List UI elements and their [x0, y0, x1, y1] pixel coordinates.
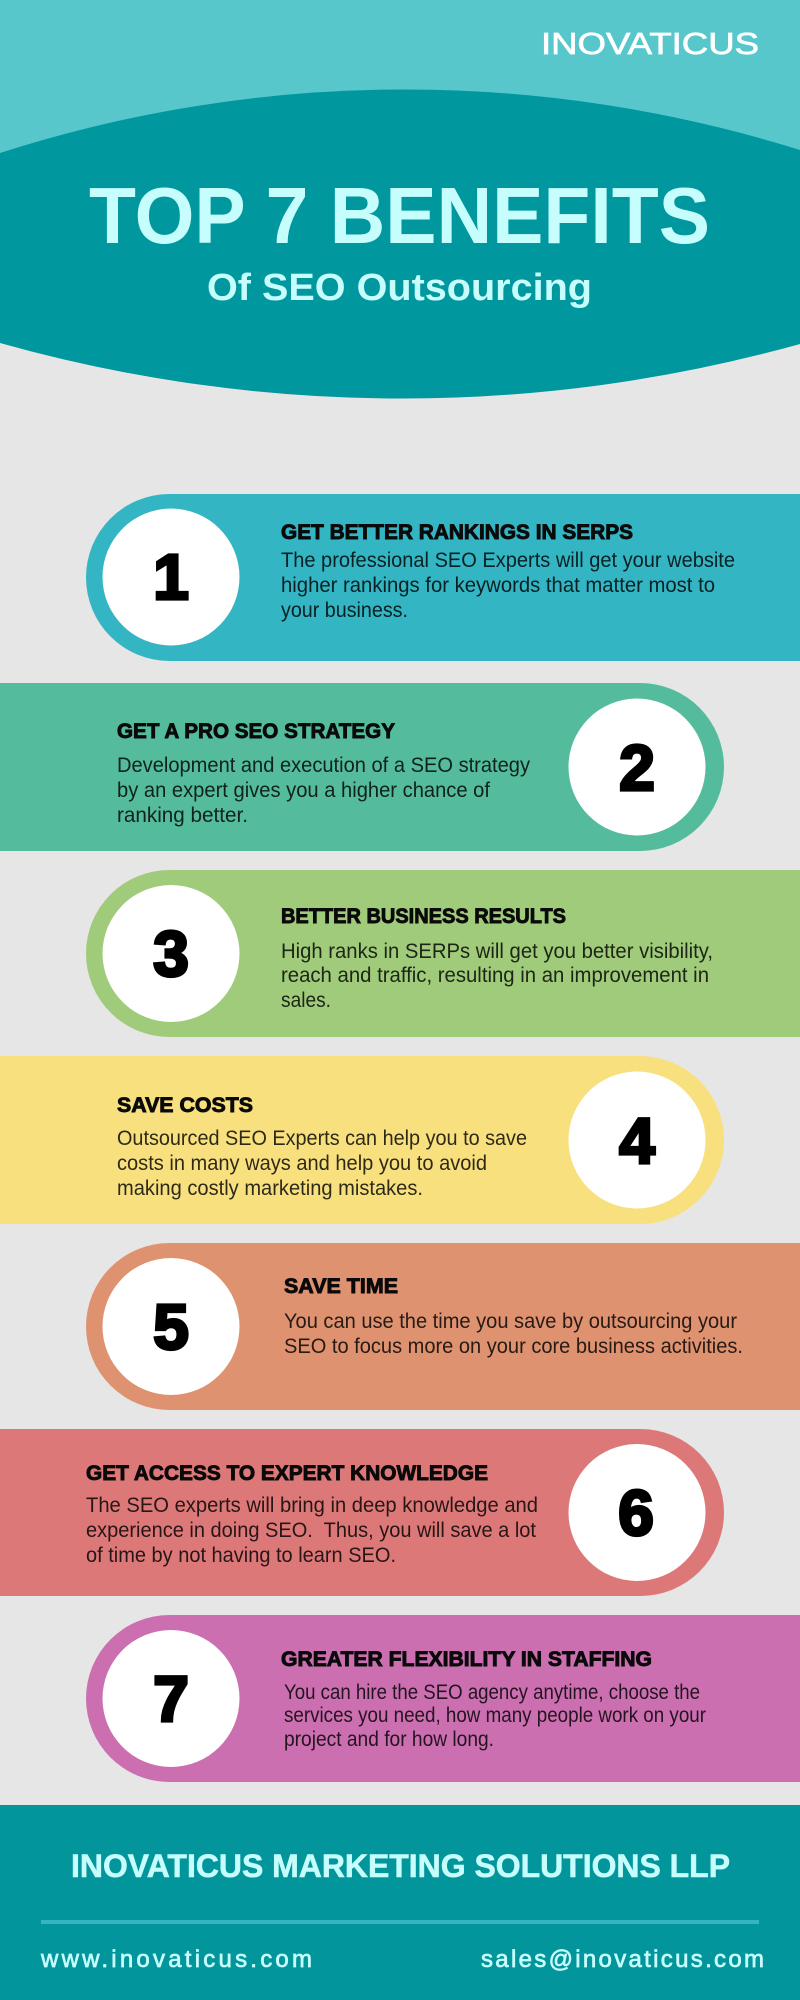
heading 2: GET A PRO SEO STRATEGY — [117, 720, 395, 743]
text block 4: Outsourced SEO Experts can help you to save — [117, 1126, 527, 1150]
panel: benefit 3 — [86, 870, 800, 1037]
number 2: 2 — [619, 732, 655, 804]
panel: benefit 2 — [0, 683, 724, 851]
heading 7: GREATER FLEXIBILITY IN STAFFING — [281, 1648, 652, 1671]
text block 5: SEO to focus more on your core business activities. — [284, 1334, 743, 1358]
text block 5: You can use the time you save by outsourcing your — [284, 1309, 737, 1333]
heading 5: SAVE TIME — [284, 1275, 398, 1298]
text block 6: The SEO experts will bring in deep knowledge and — [86, 1493, 538, 1517]
title: TOP 7 BENEFITS — [89, 171, 710, 260]
text block 7: project and for how long. — [284, 1727, 494, 1751]
number 5: 5 — [153, 1291, 189, 1363]
number 6: 6 — [618, 1477, 654, 1549]
heading 4: SAVE COSTS — [117, 1094, 253, 1117]
text block 3: High ranks in SERPs will get you better visibility, — [281, 939, 713, 963]
email link: sales@inovaticus.com — [481, 1946, 764, 1973]
panel: benefit 5 — [86, 1243, 800, 1410]
text block 1: The professional SEO Experts will get your website — [281, 548, 735, 572]
text block 2 — [117, 753, 530, 827]
heading 6: GET ACCESS TO EXPERT KNOWLEDGE — [86, 1462, 488, 1485]
subtitle: Of SEO Outsourcing — [207, 267, 592, 309]
text block 4: making costly marketing mistakes. — [117, 1176, 423, 1200]
text block 1: your business. — [281, 598, 408, 622]
text block 1: higher rankings for keywords that matter most to — [281, 573, 715, 597]
text block 7: services you need, how many people work on your — [284, 1703, 706, 1727]
header ellipse panel — [0, 89, 800, 399]
heading 3: BETTER BUSINESS RESULTS — [281, 905, 566, 928]
text block 6: experience in doing SEO. Thus, you will save a lot — [86, 1518, 536, 1542]
number 1: 1 — [153, 541, 189, 613]
text block 2: by an expert gives you a higher chance of — [117, 778, 490, 802]
text block 3 — [281, 939, 713, 1012]
text block 2: ranking better. — [117, 803, 248, 827]
number 4: 4 — [619, 1105, 655, 1177]
text block 6 — [86, 1493, 538, 1567]
panel: benefit 7 — [86, 1615, 800, 1782]
text block 4 — [117, 1126, 527, 1200]
number 7: 7 — [153, 1663, 189, 1735]
panel: benefit 4 — [0, 1056, 724, 1224]
text block 7: You can hire the SEO agency anytime, choose the — [284, 1680, 700, 1704]
text block 1 — [281, 548, 735, 622]
footer company name: INOVATICUS MARKETING SOLUTIONS LLP — [71, 1848, 730, 1884]
text block 3: reach and traffic, resulting in an improvement in — [281, 963, 709, 987]
text block 7 — [284, 1680, 706, 1751]
text block 3: sales. — [281, 988, 331, 1012]
text block 2: Development and execution of a SEO strategy — [117, 753, 530, 777]
text block 5 — [284, 1309, 743, 1358]
logo: Inovaticus: INOVATICUS — [541, 26, 759, 61]
panel: benefit 6 — [0, 1429, 724, 1596]
number 3: 3 — [153, 918, 189, 990]
panel: benefit 1 — [86, 494, 800, 661]
heading 1: GET BETTER RANKINGS IN SERPS — [281, 521, 633, 544]
website link: www.inovaticus.com — [40, 1946, 312, 1973]
text block 4: costs in many ways and help you to avoid — [117, 1151, 487, 1175]
panel: footer — [0, 1805, 800, 2000]
text block 6: of time by not having to learn SEO. — [86, 1543, 396, 1567]
header band — [0, 0, 800, 200]
